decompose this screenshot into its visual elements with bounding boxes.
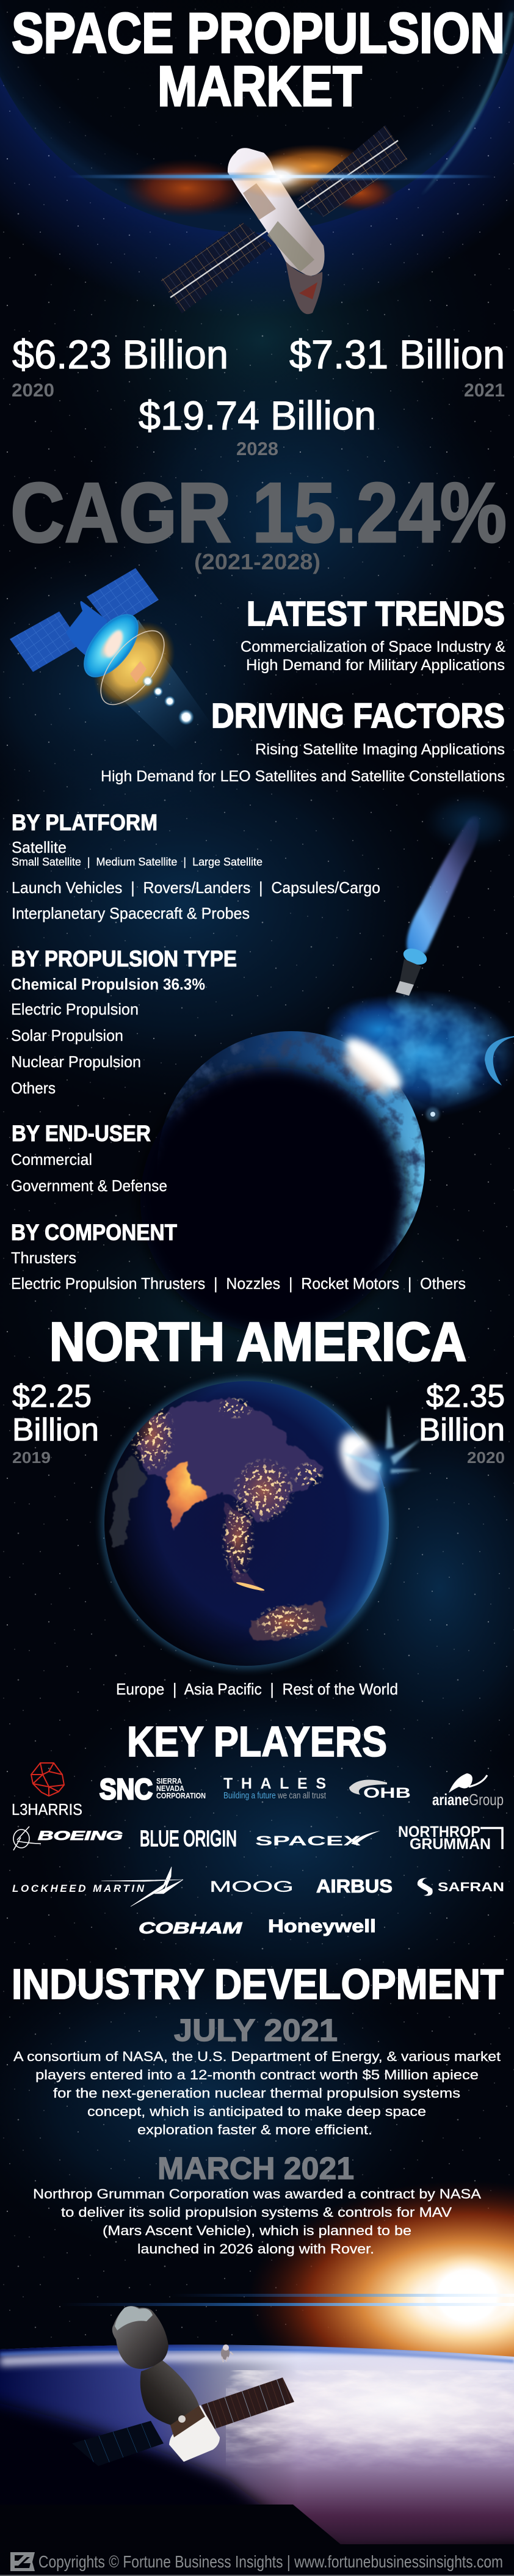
market value 2028: 2028 [236, 438, 278, 459]
logo: Lockheed Martin [12, 1867, 183, 1906]
segment: by component: Electric Propulsion Thrusters | Nozzles | Rocket Motors | Others [11, 1274, 466, 1293]
sun [247, 2181, 514, 2419]
earth horizon [0, 2344, 514, 2576]
icon: satellite beaming signal [10, 568, 214, 757]
key players heading: KEY PLAYERS [127, 1718, 387, 1765]
driving factors [101, 696, 505, 785]
logo: ArianeGroup [432, 1773, 504, 1809]
rocket [396, 946, 429, 996]
logo: Boeing: BOEING [38, 1829, 123, 1843]
segment: by platform: Interplanetary Spacecraft & Probes [12, 904, 250, 922]
development: march 2021: MARCH 2021 [157, 2151, 354, 2186]
market value 2020: 2020 [12, 379, 54, 401]
segment: by end-user: Government & Defense [11, 1177, 167, 1195]
logo: Safran [418, 1878, 504, 1896]
logo: Lockheed Martin: LOCKHEED MARTIN [12, 1883, 145, 1894]
market value 2028: $19.74 Billion [139, 393, 376, 438]
CAGR: (2021-2028) [194, 549, 320, 574]
segment: by propulsion type: Electric Propulsion [11, 1000, 139, 1018]
north america 2020 value: 2020 [467, 1448, 505, 1467]
title [12, 1, 505, 118]
development: july 2021: JULY 2021 [174, 2013, 338, 2048]
land masses [110, 1398, 328, 1640]
atmosphere streaks [418, 2253, 514, 2338]
north america 2020 value [419, 1379, 505, 1467]
logo: SpaceX: SPACEX [255, 1833, 361, 1848]
icon: Fortune Business Insights logo [10, 2552, 35, 2571]
segment: by propulsion type: Others [11, 1079, 56, 1097]
logo: Cobham: COBHAM [139, 1919, 243, 1937]
logo: L3Harris: L3HARRIS [12, 1800, 82, 1819]
segment: by platform: Launch Vehicles | Rovers/Landers | Capsules/Cargo [12, 878, 380, 897]
logo: Sierra Nevada Corporation: SIERRA [156, 1776, 183, 1786]
logo: Northrop Grumman: NORTHROP [398, 1823, 480, 1841]
logo: Safran: SAFRAN [438, 1880, 504, 1894]
development: july 2021: for the next-generation nuclear thermal propulsion systems [53, 2085, 460, 2101]
development: july 2021: A consortium of NASA, the U.S. Department of Energy, & various market [13, 2049, 501, 2064]
development: july 2021: exploration faster & more efficient. [137, 2122, 372, 2137]
segment: by propulsion type: Solar Propulsion [11, 1026, 123, 1045]
logo: Airbus: AIRBUS [316, 1875, 393, 1897]
logo: Thales [223, 1775, 327, 1801]
segment: by platform: BY PLATFORM [12, 810, 157, 835]
development: july 2021: players entered into a 12-month contract worth $5 Million apiece [35, 2067, 479, 2082]
logo: Moog: MOOG [209, 1878, 294, 1896]
image: earth at night [101, 1378, 421, 1669]
market value 2028 [139, 393, 376, 459]
latest trends: Commercialization of Space Industry & [241, 638, 505, 655]
development: july 2021 [13, 2013, 501, 2137]
north america 2019 value: Billion [12, 1412, 99, 1448]
satellite body [66, 601, 107, 660]
solar array right [297, 125, 408, 217]
development: july 2021: concept, which is anticipated to make deep space [87, 2104, 426, 2119]
beam [101, 619, 214, 757]
segment: by component: Thrusters [11, 1249, 76, 1267]
driving factors: Rising Satellite Imaging Applications [255, 741, 505, 758]
development: march 2021: to deliver its solid propulsion systems & controls for MAV [61, 2205, 452, 2220]
capsule [112, 2306, 220, 2462]
logo: Thales: Building a future we can all trust [223, 1790, 327, 1801]
regional heading: NORTH AMERICA [49, 1311, 466, 1372]
logo: Blue Origin: BLUE ORIGIN [140, 1826, 237, 1851]
solar mast [170, 140, 398, 297]
latest trends: High Demand for Military Applications [246, 657, 505, 674]
development: march 2021: Northrop Grumman Corporation was awarded a contract by NASA [33, 2186, 481, 2202]
other regions: Europe | Asia Pacific | Rest of the World [116, 1680, 398, 1698]
logo: Northrop Grumman [398, 1823, 502, 1853]
lens flare [65, 155, 494, 199]
dish [74, 605, 148, 686]
footer [0, 2552, 514, 2576]
solar panel left [10, 611, 81, 672]
development: march 2021: launched in 2026 along with Rover. [137, 2241, 374, 2257]
north america 2019 value: 2019 [12, 1448, 51, 1467]
segment: by propulsion type: Chemical Propulsion 36.3% [11, 975, 205, 993]
north america 2019 value [12, 1379, 99, 1467]
blue planet [140, 1031, 425, 1334]
logo: ArianeGroup: arianeGroup [432, 1790, 504, 1809]
solar array left [161, 222, 272, 313]
night side [0, 2398, 514, 2576]
market value 2021: $7.31 Billion [289, 332, 505, 377]
bottom image: spacecraft over earth [0, 2181, 514, 2576]
city lights [129, 1397, 324, 1640]
north america 2020 value: $2.35 [426, 1379, 505, 1414]
market value 2020: $6.23 Billion [12, 332, 228, 377]
logo: Sierra Nevada Corporation: NEVADA [156, 1784, 185, 1793]
segment: by propulsion type: BY PROPULSION TYPE [11, 946, 237, 971]
segment: by propulsion type [11, 946, 237, 1097]
title: MARKET [157, 54, 362, 118]
solar panel right [87, 568, 159, 629]
logo: Honeywell: Honeywell [268, 1916, 376, 1936]
logo: SpaceX [255, 1831, 380, 1848]
logo: OHB [349, 1780, 411, 1801]
driving factors: High Demand for LEO Satellites and Satellite Constellations [101, 768, 505, 785]
hero image: planet and space station [0, 0, 514, 318]
logo: Thales: THALES [223, 1775, 326, 1792]
market value 2021: 2021 [464, 379, 505, 401]
market value 2020 [12, 332, 228, 401]
astronaut [221, 2344, 233, 2362]
logo: L3Harris [12, 1763, 82, 1819]
development: march 2021: (Mars Ascent Vehicle), which is planned to be [103, 2223, 411, 2238]
station body [228, 148, 325, 314]
solar panel left [72, 2421, 164, 2466]
logo: Sierra Nevada Corporation: SNC [100, 1773, 153, 1805]
segment: by component: BY COMPONENT [11, 1220, 177, 1245]
market value 2021 [289, 332, 505, 401]
signal dots [142, 676, 194, 725]
north america 2020 value: Billion [419, 1412, 505, 1448]
sun flare [331, 1405, 421, 1496]
logo: Northrop Grumman: GRUMMAN [410, 1836, 491, 1853]
north america 2019 value: $2.25 [12, 1379, 92, 1414]
segment: by end-user [11, 1121, 167, 1195]
rocket flame [407, 816, 479, 955]
logo: OHB: OHB [363, 1785, 411, 1801]
crescent moon [485, 1036, 514, 1085]
segment: by platform [12, 810, 380, 922]
segment: by end-user: Commercial [11, 1150, 92, 1169]
logo: Sierra Nevada Corporation: CORPORATION [156, 1791, 206, 1800]
latest trends [241, 594, 505, 674]
segment: by platform: Small Satellite | Medium Satellite | Large Satellite [12, 856, 262, 868]
logo: Sierra Nevada Corporation [100, 1773, 206, 1805]
segment: by platform: Satellite [12, 838, 67, 856]
logo: Boeing [13, 1826, 123, 1850]
development: march 2021 [33, 2151, 481, 2257]
solar panel right [201, 2377, 294, 2429]
segment: by end-user: BY END-USER [12, 1121, 151, 1146]
image: rocket and blue planet [140, 791, 514, 1334]
segment: by propulsion type: Nuclear Propulsion [11, 1053, 141, 1071]
segment: by component [11, 1220, 466, 1293]
